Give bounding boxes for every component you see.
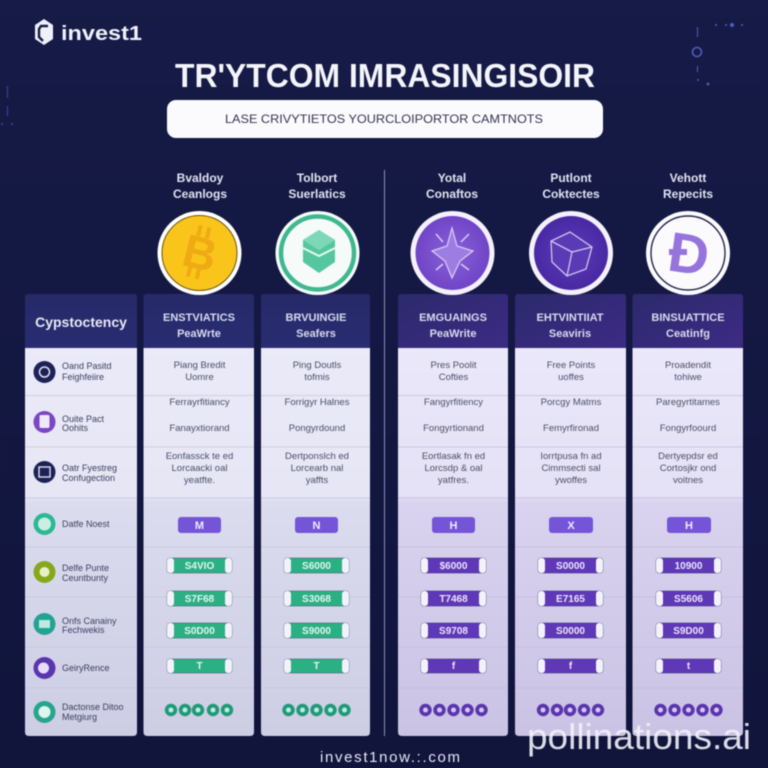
body: t bbox=[687, 661, 691, 672]
column headings: Tolbort bbox=[297, 171, 337, 185]
body: E7165 bbox=[556, 594, 585, 605]
body: row labels: Oatr Fyestreg bbox=[62, 463, 117, 473]
header: Ceatinfg bbox=[666, 328, 710, 340]
body bbox=[144, 348, 254, 736]
body: Eortlasak fn ed bbox=[422, 451, 485, 462]
body: Lorcsdp & oal bbox=[424, 463, 483, 474]
body: yatfres. bbox=[438, 475, 469, 486]
body: Proadendit bbox=[665, 360, 711, 371]
body: row labels: GeiryRence bbox=[62, 663, 110, 673]
body: f bbox=[569, 661, 573, 672]
body: row labels: Delfe Punte bbox=[62, 563, 109, 573]
body: Ferrayrfitiancy bbox=[169, 397, 230, 408]
decoration: top right network dots bbox=[692, 23, 743, 85]
header: BINSUATTICE bbox=[651, 312, 725, 324]
body bbox=[261, 348, 370, 736]
body: Pres Poolit bbox=[431, 360, 477, 371]
panel: column 5 bbox=[632, 294, 743, 736]
column headings: Vehott bbox=[670, 171, 706, 185]
body: f bbox=[452, 661, 456, 672]
logo wordmark: invest1 bbox=[61, 23, 142, 45]
column headings bbox=[173, 171, 713, 201]
body: row labels: Onfs Canainy bbox=[62, 616, 117, 626]
panel: cryptocurrency row labels bbox=[25, 294, 137, 736]
body: H bbox=[685, 520, 693, 532]
panel: column 1 bbox=[144, 294, 254, 736]
header bbox=[261, 294, 370, 348]
header: Seaviris bbox=[549, 328, 591, 340]
header: PeaWrite bbox=[430, 328, 476, 340]
body: X bbox=[567, 520, 575, 532]
body: N bbox=[313, 520, 321, 532]
body: row labels: Dactonse Ditoo bbox=[62, 702, 124, 712]
body: H bbox=[450, 520, 458, 532]
body: Dertponslch ed bbox=[285, 451, 349, 462]
body: M bbox=[195, 520, 204, 532]
body: S6000 bbox=[302, 561, 331, 572]
column headings: Repecits bbox=[663, 187, 713, 201]
body: S3068 bbox=[302, 594, 331, 605]
column headings: Conaftos bbox=[426, 187, 478, 201]
body: 10900 bbox=[675, 561, 703, 572]
header: cryptocurrency: Cypstoctency bbox=[35, 314, 127, 330]
body: Free Points bbox=[547, 360, 596, 371]
column headings: Putlont bbox=[550, 171, 592, 185]
header: BRVUINGIE bbox=[286, 312, 346, 324]
body: $6000 bbox=[440, 561, 468, 572]
body: row labels: Oand Pasitd bbox=[62, 361, 112, 371]
icon: green cube coin bbox=[276, 211, 360, 295]
body: Eonfassck te ed bbox=[166, 451, 233, 462]
column headings: Bvaldoy bbox=[177, 171, 224, 185]
body: Pongyrdound bbox=[289, 423, 345, 434]
body: Dertyepdsr ed bbox=[658, 451, 718, 462]
column headings: Coktectes bbox=[542, 187, 600, 201]
icon: yellow bitcoin coin bbox=[158, 211, 242, 295]
title: TR'YTCOM IMRASINGISOIR bbox=[175, 57, 595, 94]
body: row labels: Ceuntbunty bbox=[62, 573, 109, 583]
subtitle banner bbox=[167, 100, 603, 138]
column headings: Yotal bbox=[438, 171, 466, 185]
body: Fongyrfoourd bbox=[660, 423, 716, 434]
body: voitnes bbox=[673, 475, 703, 486]
body: Paregyrtitames bbox=[656, 397, 720, 408]
body: Uomre bbox=[185, 372, 214, 383]
body: Iorrtpusa fn ad bbox=[540, 451, 602, 462]
column headings: Ceanlogs bbox=[173, 187, 227, 201]
icon: white purple coin: D bbox=[665, 220, 713, 288]
body: S0000 bbox=[556, 561, 585, 572]
body: tofmis bbox=[304, 372, 330, 383]
header: PeaWrte bbox=[177, 328, 221, 340]
body bbox=[398, 348, 508, 736]
body: T bbox=[313, 661, 320, 672]
header: EHTVINTIIAT bbox=[536, 312, 604, 324]
icon: purple star coin bbox=[410, 211, 494, 295]
body: row labels: Confugection bbox=[62, 473, 115, 483]
body: S9000 bbox=[302, 626, 331, 637]
body: Lorcaacki oal bbox=[172, 463, 227, 474]
body: Ping Doutls bbox=[293, 360, 342, 371]
panel: column 4 bbox=[515, 294, 626, 736]
body: row labels: Oohits bbox=[62, 423, 89, 433]
icon: yellow bitcoin coin: B bbox=[178, 224, 222, 282]
body: yeatfte. bbox=[184, 475, 215, 486]
body bbox=[632, 348, 743, 736]
body: row labels: Fechwekis bbox=[62, 625, 105, 635]
body: Cortosjkr ond bbox=[660, 463, 716, 474]
body: Cofties bbox=[439, 372, 469, 383]
panel: column 3 bbox=[398, 294, 508, 736]
body: Fongyrtionand bbox=[423, 423, 484, 434]
body: S0D00 bbox=[184, 626, 215, 637]
icon: logo hexagon bbox=[35, 19, 53, 45]
body: S5606 bbox=[674, 594, 703, 605]
body: T7468 bbox=[439, 594, 468, 605]
body: Fanayxtiorand bbox=[169, 423, 230, 434]
body: row labels bbox=[25, 348, 137, 736]
header bbox=[632, 294, 743, 348]
body: Forrigyr Halnes bbox=[285, 397, 350, 408]
body: row labels: Metgiurg bbox=[62, 712, 97, 722]
body: S7F68 bbox=[185, 594, 215, 605]
body bbox=[515, 348, 626, 736]
body: ywoffes bbox=[555, 475, 587, 486]
header: Seafers bbox=[296, 328, 336, 340]
body: yaffts bbox=[306, 475, 329, 486]
body: uoffes bbox=[558, 372, 584, 383]
icon: violet cube coin bbox=[529, 211, 613, 295]
body: row labels: Feighfeiire bbox=[62, 372, 104, 382]
body: S9708 bbox=[439, 626, 468, 637]
body: S9D00 bbox=[673, 626, 704, 637]
header bbox=[398, 294, 508, 348]
body: Porcgy Matms bbox=[541, 397, 602, 408]
watermark: pollinations.ai bbox=[527, 716, 751, 757]
subtitle banner: LASE CRIVYTIETOS YOURCLOIPORTOR CAMTNOTS bbox=[225, 112, 543, 126]
body: Lorcearb nal bbox=[291, 463, 343, 474]
body: tohiwe bbox=[674, 372, 702, 383]
column headings: Suerlatics bbox=[288, 187, 346, 201]
body: Piang Bredit bbox=[174, 360, 226, 371]
body: Cimmsecti sal bbox=[541, 463, 601, 474]
body: Fangyrfitiency bbox=[424, 397, 483, 408]
logo bbox=[35, 19, 142, 45]
body: S4VIO bbox=[185, 561, 214, 572]
body: row labels: Ouite Pact bbox=[62, 414, 105, 424]
footer url: invest1now.:.com bbox=[320, 749, 460, 766]
body: Femyrfironad bbox=[543, 423, 599, 434]
header bbox=[144, 294, 254, 348]
header: EMGUAINGS bbox=[419, 312, 487, 324]
icon: white purple coin bbox=[646, 211, 730, 295]
decoration: left network dots bbox=[1, 86, 13, 125]
panel: column 2 bbox=[261, 294, 370, 736]
body: row labels: Datfe Noest bbox=[62, 519, 110, 529]
header bbox=[515, 294, 626, 348]
center divider bbox=[384, 170, 385, 736]
header: ENSTVIATICS bbox=[163, 312, 235, 324]
body: T bbox=[196, 661, 203, 672]
header: cryptocurrency bbox=[25, 294, 137, 348]
body: S0000 bbox=[556, 626, 585, 637]
